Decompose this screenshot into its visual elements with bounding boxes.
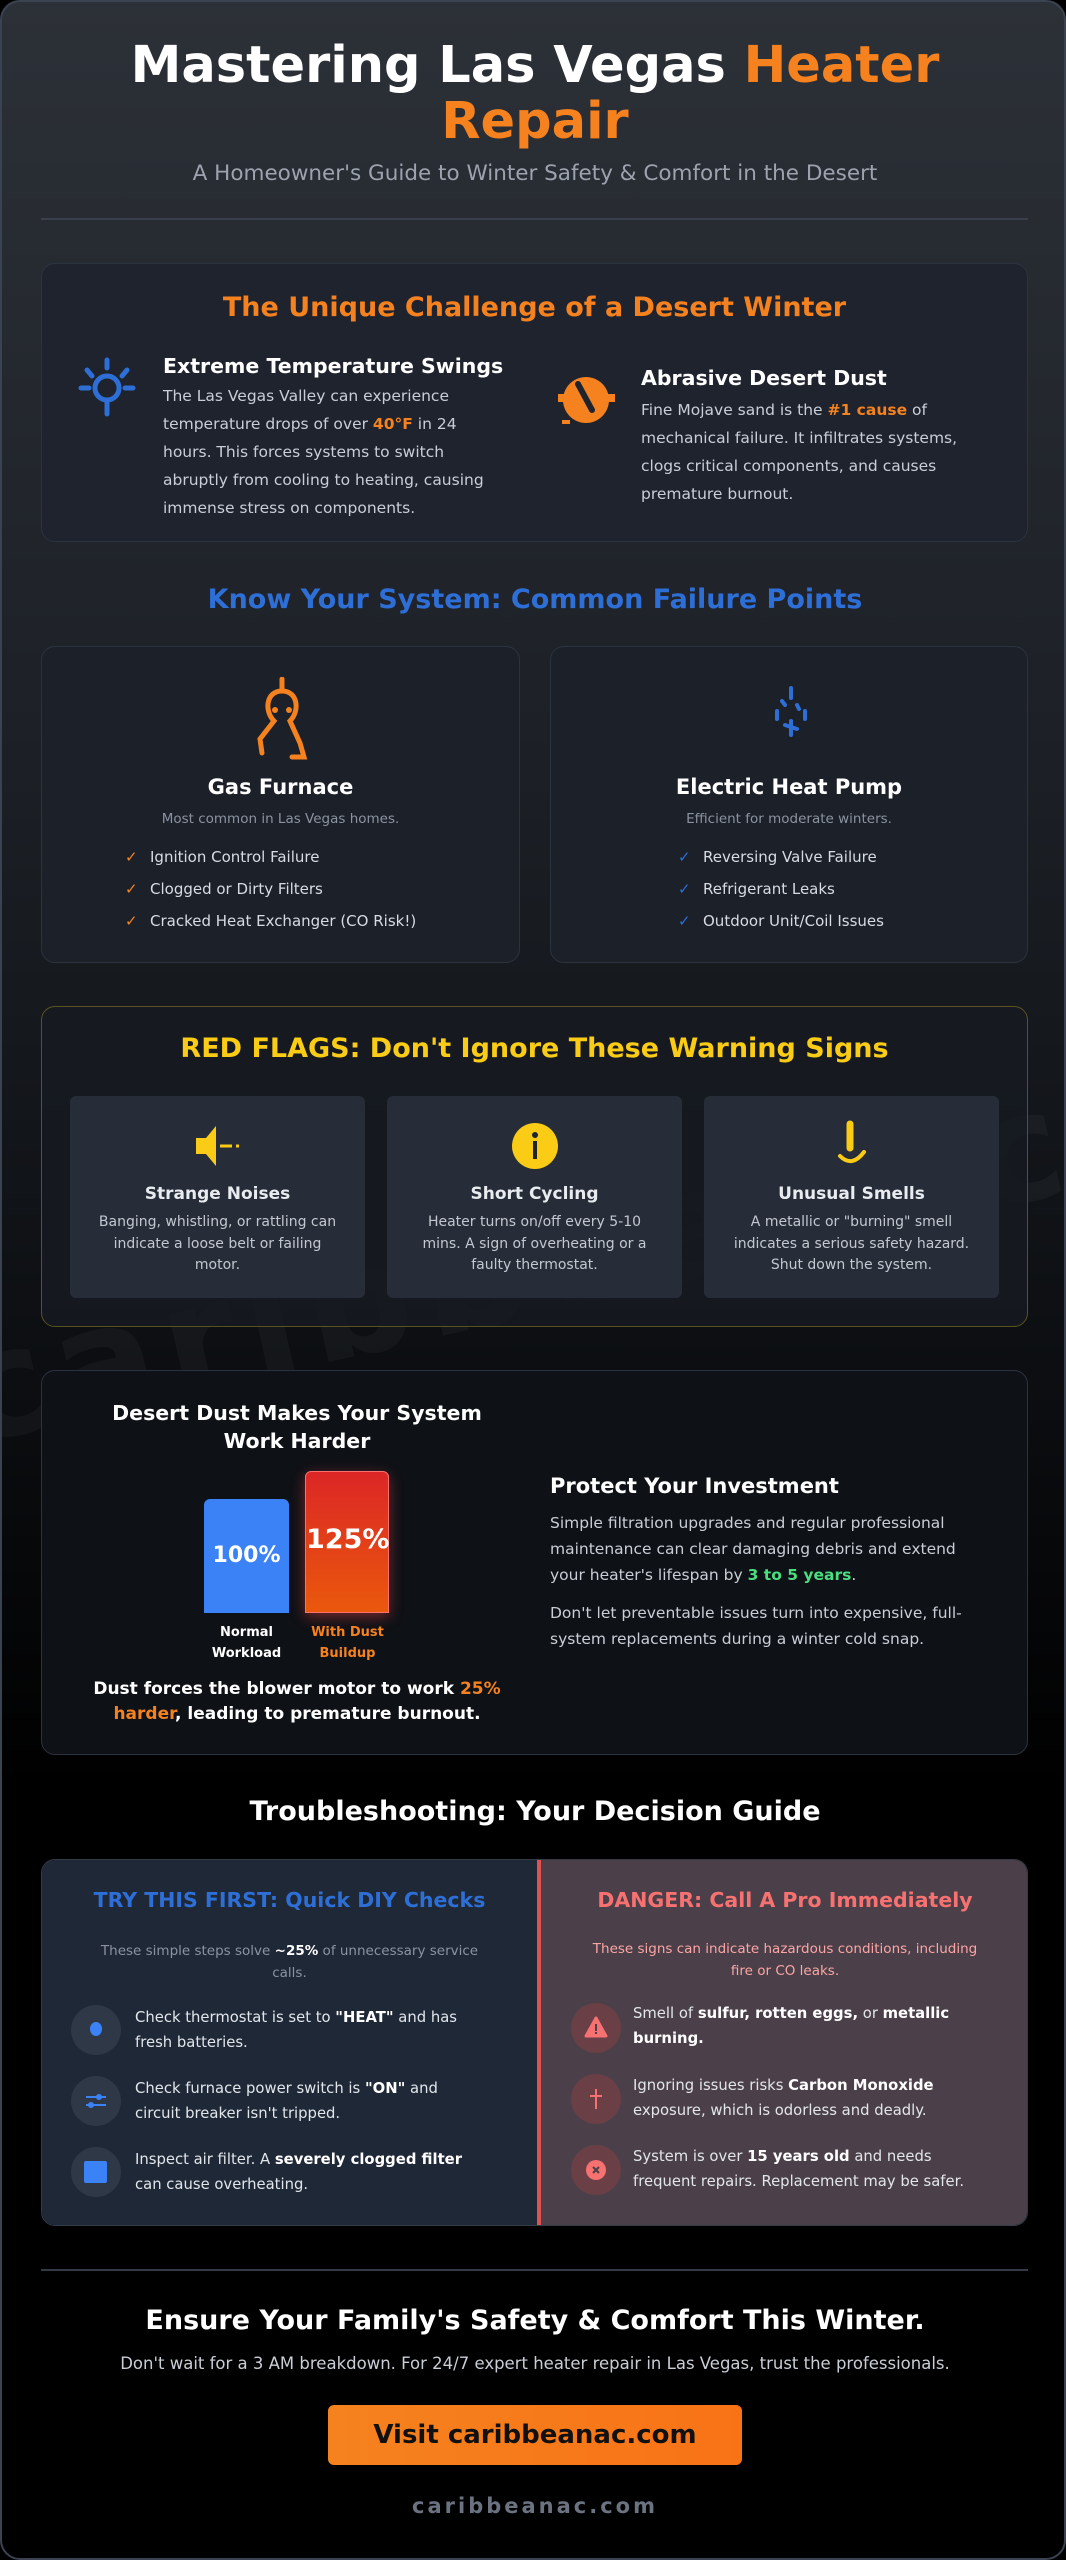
text: protect your investment xyxy=(550,1474,962,1648)
icon: age xyxy=(571,2145,621,2195)
bar chart: Normal xyxy=(220,1625,273,1640)
list: furnace failures xyxy=(125,848,416,930)
card: unusual smells xyxy=(704,1096,999,1298)
panel: gas furnace: Most common in Las Vegas homes. xyxy=(162,811,399,827)
bar chart: Buildup xyxy=(320,1646,375,1661)
bar chart: With Dust xyxy=(311,1625,384,1640)
caption: blower motor: Dust forces the blower motor to work 25% harder, leading to premature burnout. xyxy=(93,1679,501,1724)
cta heading: Ensure Your Family's Safety & Comfort This Winter. xyxy=(145,2305,925,2336)
card: short cycling xyxy=(387,1096,682,1298)
list: furnace failures: ✓ xyxy=(125,848,138,866)
text: protect your investment: Simple filtration upgrades and regular professional maintenance can clear damaging debris and extend your heater's lifespan by 3 to 5 years. xyxy=(550,1514,956,1584)
text: temperature swings: Extreme Temperature Swings xyxy=(163,354,503,378)
icon: smell xyxy=(838,1120,866,1164)
panel: danger call a pro xyxy=(541,1860,1029,2227)
icon: temperature sun xyxy=(78,358,136,416)
panel: red flags xyxy=(41,1006,1028,1327)
bar: dust: 125% xyxy=(306,1524,389,1555)
card: strange noises: Banging, whistling, or rattling can indicate a loose belt or failing motor. xyxy=(99,1214,336,1273)
panel: dust chart xyxy=(41,1370,1028,1755)
footer: caribbeanac.com xyxy=(412,2494,658,2518)
list: furnace failures: Ignition Control Failure xyxy=(150,848,319,866)
panel: decision guide xyxy=(41,1859,1028,2226)
panel: danger call a pro: DANGER: Call A Pro Immediately xyxy=(597,1888,973,1912)
bar: normal: 100% xyxy=(213,1543,280,1568)
panel: heat pump xyxy=(550,646,1028,963)
icon: heat pump xyxy=(775,686,807,737)
chart title: Desert Dust Makes Your System Work Harder xyxy=(112,1401,482,1453)
card: short cycling: Short Cycling xyxy=(470,1184,598,1204)
icon: info xyxy=(512,1123,558,1169)
list: furnace failures: Clogged or Dirty Filters xyxy=(150,880,323,898)
text: protect your investment: Protect Your Investment xyxy=(550,1474,839,1498)
button: visit: Visit caribbeanac.com xyxy=(373,2420,697,2450)
panel: DIY checks: These simple steps solve ~25% of unnecessary service calls. xyxy=(101,1943,478,1981)
panel: DIY checks: TRY THIS FIRST: Quick DIY Checks xyxy=(94,1888,485,1912)
heading: troubleshooting: Troubleshooting: Your Decision Guide xyxy=(249,1796,821,1827)
title: gas furnace: Gas Furnace xyxy=(208,775,353,799)
list: heat pump failures: Outdoor Unit/Coil Issues xyxy=(703,912,884,930)
heading: red flags: RED FLAGS: Don't Ignore These Warning Signs xyxy=(180,1033,889,1064)
icon: furnace xyxy=(257,677,308,760)
list: furnace failures: Cracked Heat Exchanger (CO Risk!) xyxy=(150,912,416,930)
text: protect your investment: Don't let preventable issues turn into expensive, full-system replacements during a winter cold snap. xyxy=(550,1604,962,1648)
text: temperature swings: The Las Vegas Valley can experience temperature drops of over 40°F in 24 hours. This forces systems to switch abruptly from cooling to heating, causing immense stress on components. xyxy=(163,387,484,517)
heading: unique challenge: The Unique Challenge of a Desert Winter xyxy=(223,292,846,323)
bar chart: Workload xyxy=(212,1646,281,1661)
panel: heat pump: Efficient for moderate winters. xyxy=(686,811,892,827)
panel: DIY checks xyxy=(42,1860,537,2227)
list: heat pump failures: ✓ xyxy=(678,880,691,898)
subtitle: A Homeowner's Guide to Winter Safety & Comfort in the Desert xyxy=(193,161,877,186)
list: furnace failures: ✓ xyxy=(125,912,138,930)
bar chart xyxy=(204,1466,398,1661)
card: strange noises: Strange Noises xyxy=(145,1184,290,1204)
bar: dust xyxy=(305,1471,389,1613)
title: Mastering Las Vegas Heater xyxy=(131,36,939,95)
icon: CO xyxy=(571,2074,621,2124)
panel: danger call a pro: Ignoring issues risks Carbon Monoxide exposure, which is odorless and deadly. xyxy=(633,2077,934,2119)
card: unusual smells: A metallic or "burning" smell indicates a serious safety hazard. Shut down the system. xyxy=(734,1214,969,1273)
panel: gas furnace xyxy=(41,646,520,963)
panel: DIY checks: Check furnace power switch is "ON" and circuit breaker isn't tripped. xyxy=(135,2080,438,2122)
panel: danger call a pro: Smell of sulfur, rotten eggs, or metallic burning. xyxy=(633,2005,949,2047)
title xyxy=(131,36,940,151)
icon: speaker xyxy=(196,1126,239,1166)
panel: DIY checks: Inspect air filter. A severely clogged filter can cause overheating. xyxy=(135,2151,462,2193)
panel: danger call a pro: These signs can indicate hazardous conditions, including fire or CO leaks. xyxy=(593,1941,977,1979)
title: heat pump: Electric Heat Pump xyxy=(676,775,902,799)
text: abrasive dust: Fine Mojave sand is the #1 cause of mechanical failure. It infiltrates systems, clogs critical components, and causes premature burnout. xyxy=(641,401,957,503)
panel: desert winter challenge xyxy=(41,263,1028,542)
icon: filter xyxy=(71,2147,121,2197)
card: strange noises xyxy=(70,1096,365,1298)
card: short cycling: Heater turns on/off every 5-10 mins. A sign of overheating or a faulty thermostat. xyxy=(423,1214,646,1273)
list: heat pump failures: ✓ xyxy=(678,848,691,866)
icon: switch xyxy=(71,2076,121,2126)
list: heat pump failures: ✓ xyxy=(678,912,691,930)
icon: warning xyxy=(571,2003,621,2053)
list: heat pump failures: Refrigerant Leaks xyxy=(703,880,835,898)
heading: know your system: Know Your System: Common Failure Points xyxy=(208,584,862,615)
panel: danger call a pro: System is over 15 years old and needs frequent repairs. Replacement may be safer. xyxy=(633,2148,964,2190)
list: furnace failures: ✓ xyxy=(125,880,138,898)
title: Repair xyxy=(441,92,629,151)
bar: normal xyxy=(204,1499,289,1613)
cta text: Don't wait for a 3 AM breakdown. For 24/7 expert heater repair in Las Vegas, trust the professionals. xyxy=(120,2354,950,2373)
icon: dust xyxy=(558,377,615,424)
icon: thermostat xyxy=(71,2005,121,2055)
panel: DIY checks: Check thermostat is set to "HEAT" and has fresh batteries. xyxy=(135,2009,457,2051)
list: heat pump failures xyxy=(678,848,884,930)
card: unusual smells: Unusual Smells xyxy=(778,1184,925,1204)
list: heat pump failures: Reversing Valve Failure xyxy=(703,848,877,866)
text: abrasive dust: Abrasive Desert Dust xyxy=(641,366,887,390)
button: visit xyxy=(328,2405,742,2465)
